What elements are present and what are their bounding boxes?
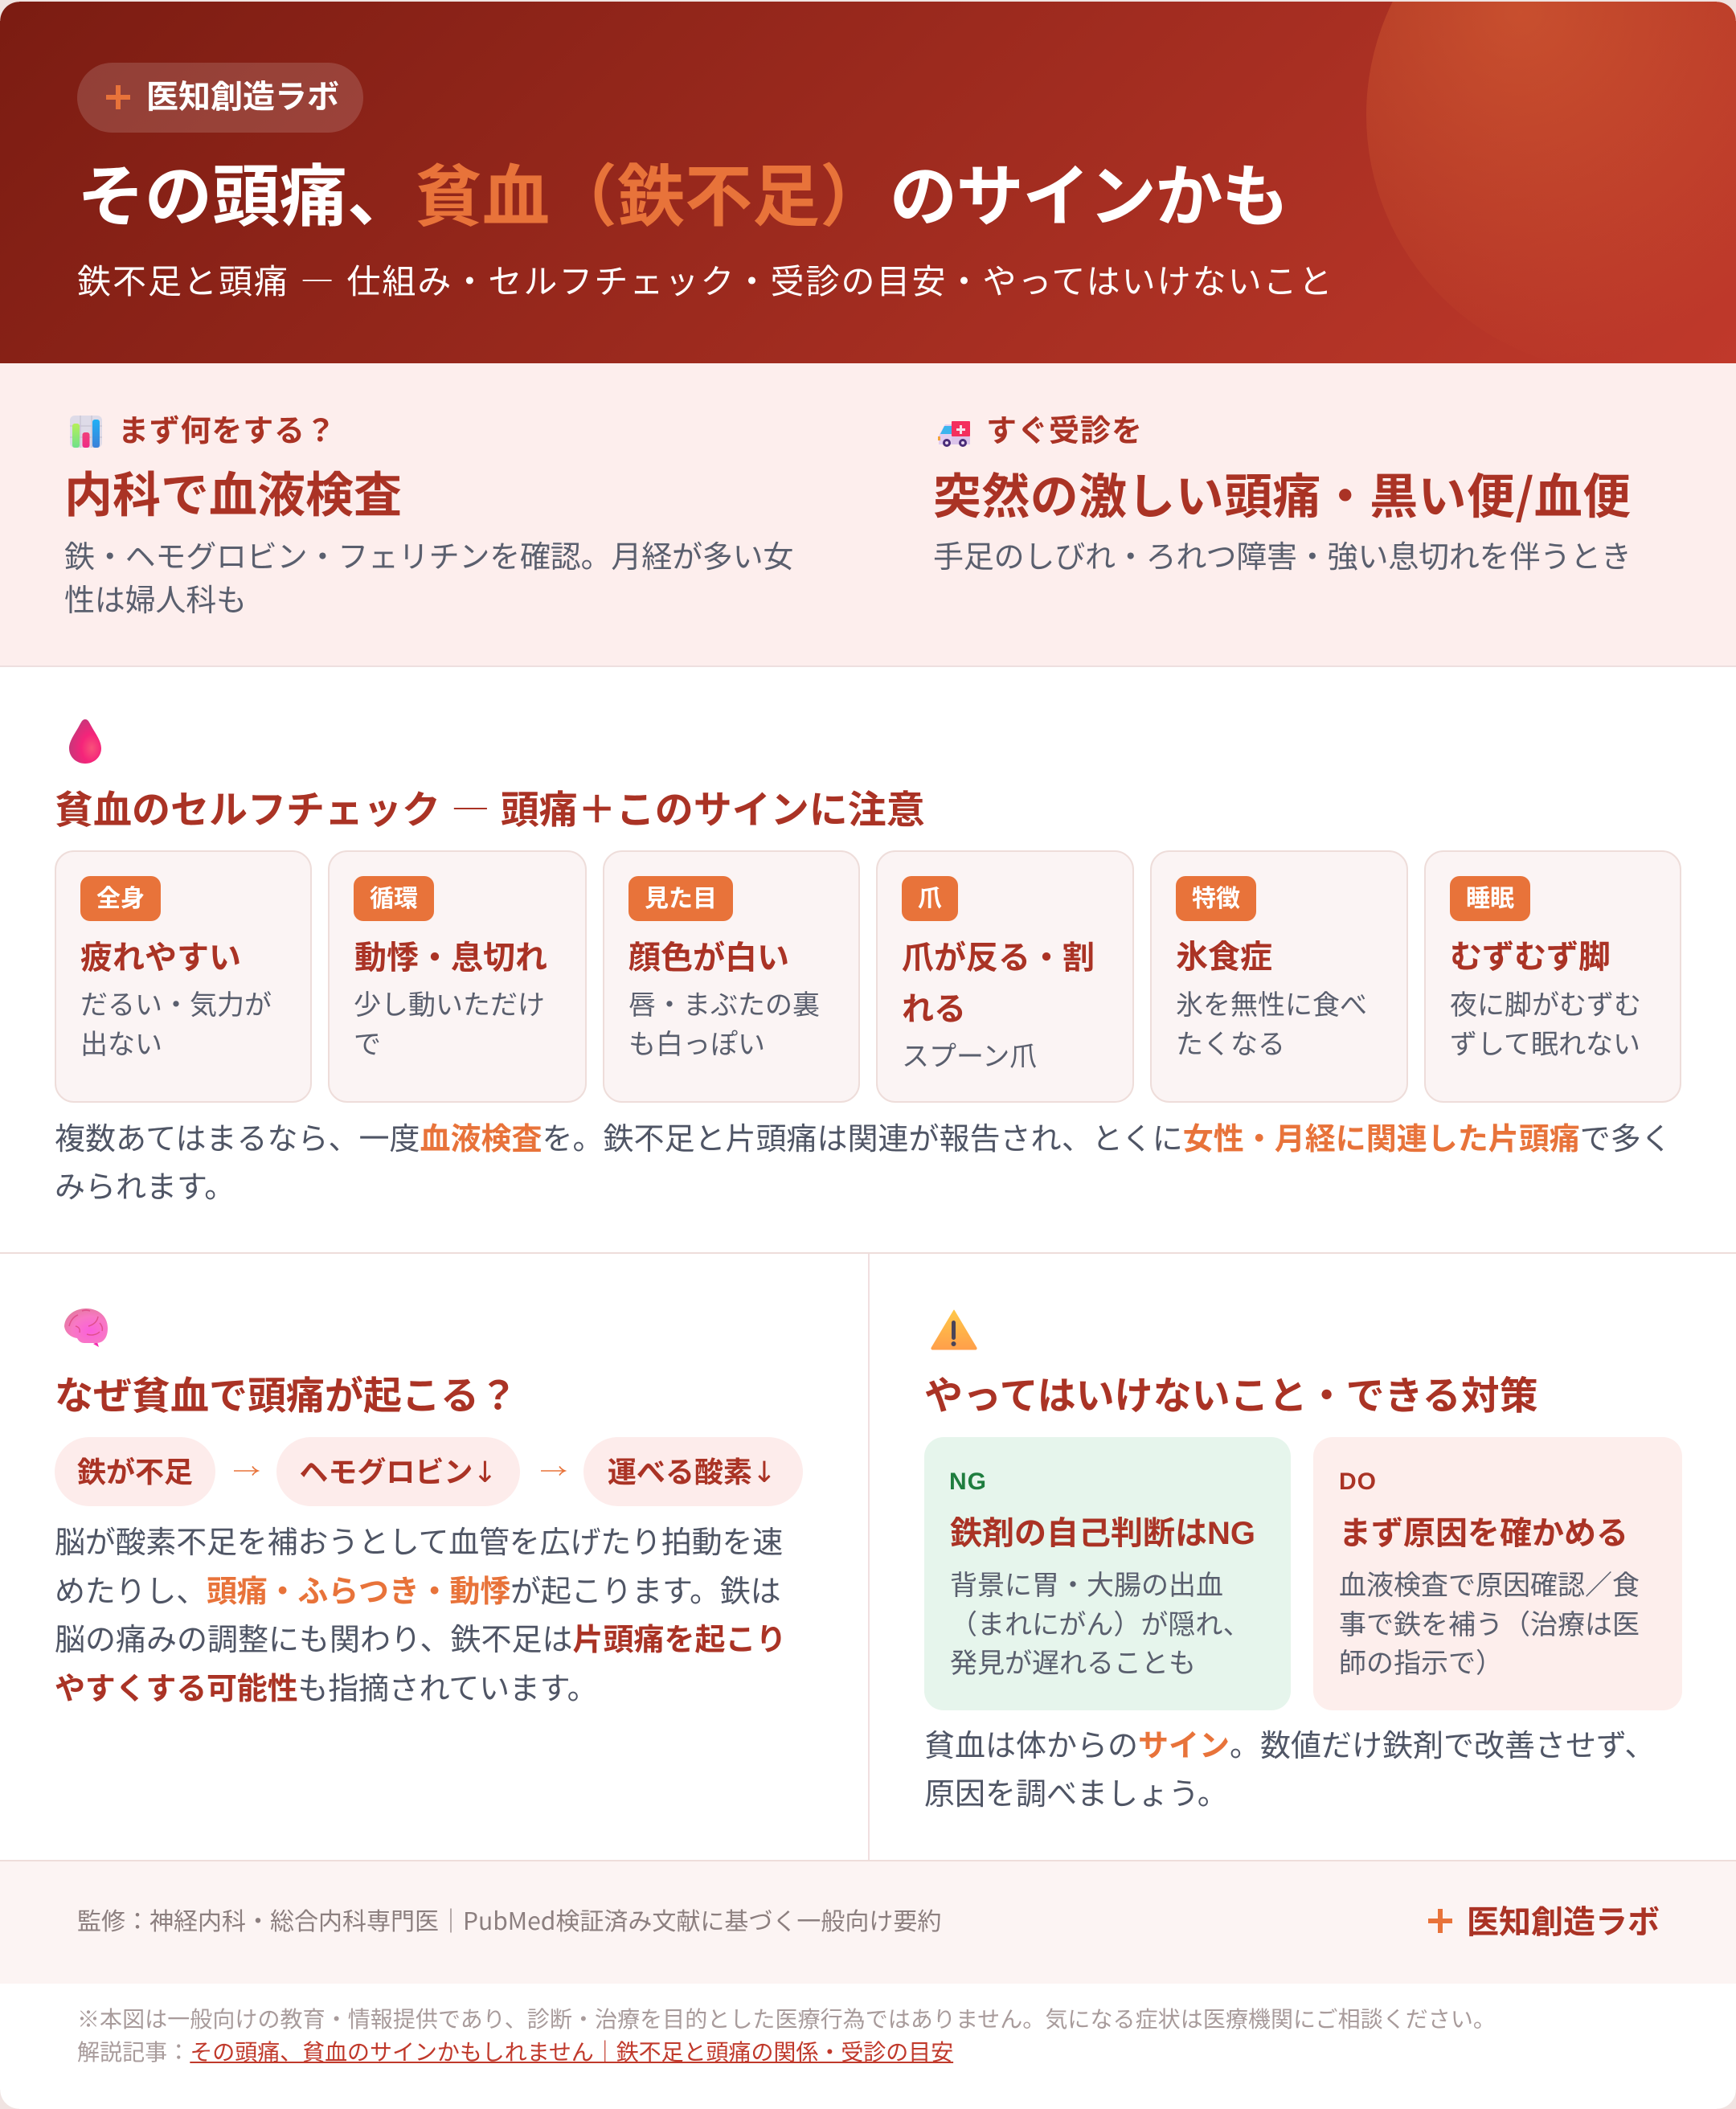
DO text: [1339, 1566, 1640, 1683]
mechanism text: やすくする可能性も指摘されています。: [55, 1673, 597, 1706]
footer brand: 医知創造ラボ: [1467, 1905, 1660, 1940]
subtitle: 鉄不足と頭痛 — 仕組み・セルフチェック・受診の目安・やってはいけないこと: [77, 255, 1334, 304]
step: [55, 1437, 215, 1506]
tag: 爪: [918, 886, 942, 912]
DO text: 師の指示で）: [1339, 1648, 1503, 1679]
divider: [0, 1252, 1736, 1254]
icon: warning: [931, 1308, 977, 1350]
label: すぐ受診を: [986, 415, 1143, 448]
card: fatigue: [55, 850, 312, 1103]
panel: dos and don'ts: [870, 1254, 1736, 1860]
text: 手足のしびれ・ろれつ障害・強い息切れを伴うとき: [933, 541, 1632, 575]
caution note: 貧血は体からのサイン。数値だけ鉄剤で改善させず、: [924, 1730, 1655, 1763]
NG box: [924, 1437, 1291, 1710]
icon: ambulance: [938, 421, 970, 447]
tag: 特徴: [1192, 886, 1240, 912]
mechanism text: 脳の痛みの調整にも関わり、鉄不足は片頭痛を起こり: [55, 1624, 786, 1657]
card text: 少し動いただけ: [354, 990, 545, 1021]
card title: 疲れやすい: [80, 940, 241, 976]
card title: [902, 940, 1095, 1027]
disclaimer: 解説記事：その頭痛、貧血のサインかもしれません｜鉄不足と頭痛の関係・受診の目安: [77, 2040, 953, 2065]
tag: [354, 876, 434, 921]
heading: やってはいけないこと・できる対策: [924, 1375, 1538, 1418]
card title: 爪が反る・割: [902, 940, 1095, 976]
caution note: 原因を調べましょう。: [924, 1778, 1228, 1812]
divider: [868, 1254, 870, 1861]
card: pagophagia: [1150, 850, 1408, 1103]
tag: 睡眠: [1466, 886, 1514, 912]
NG label: NG: [949, 1468, 987, 1495]
card text: [354, 990, 545, 1059]
symptom cards: [55, 850, 1681, 1103]
self-check note: みられます。: [55, 1171, 235, 1205]
icon: blood drop: [69, 719, 101, 764]
self-check note: [55, 1123, 1672, 1205]
decorative circle: [1366, 0, 1736, 372]
heading: 突然の激しい頭痛・黒い便/血便: [933, 458, 1631, 528]
card title: 氷食症: [1176, 940, 1272, 975]
card title: 動悸・息切れ: [354, 940, 547, 976]
supervision note: 監修：神経内科・総合内科専門医｜PubMed検証済み文献に基づく一般向け要約: [77, 1902, 941, 1937]
NG title: 鉄剤の自己判断はNG: [950, 1516, 1255, 1551]
card title: むずむず脚: [1450, 940, 1611, 975]
header banner: [0, 2, 1736, 363]
left column: what to do first: [64, 415, 793, 618]
footer brand: [1428, 1898, 1661, 1947]
tag: [1450, 876, 1530, 921]
tag: 循環: [370, 886, 418, 912]
card text: [80, 990, 272, 1059]
disclaimer: ※本図は一般向けの教育・情報提供であり、診断・治療を目的とした医療行為ではありません。気になる症状は医療機関にご相談ください。: [77, 2007, 1496, 2032]
card text: たくなる: [1176, 1029, 1285, 1059]
tag: [902, 876, 958, 921]
NG text: [950, 1566, 1251, 1683]
icon: bar chart: [70, 416, 102, 448]
right column: see a doctor immediately: [933, 415, 1632, 575]
causal chain: [55, 1437, 803, 1506]
NG text: 背景に胃・大腸の出血: [950, 1570, 1223, 1601]
label: まず何をする？: [118, 415, 337, 448]
heading: 内科で血液検査: [64, 469, 402, 522]
panel: self check: [55, 719, 925, 834]
mechanism text: [55, 1519, 786, 1714]
NG text: 発見が遅れることも: [950, 1648, 1196, 1679]
step: 鉄が不足: [77, 1456, 193, 1489]
card text: 氷を無性に食べ: [1176, 990, 1367, 1021]
text: 鉄・ヘモグロビン・フェリチンを確認。月経が多い女: [64, 541, 793, 575]
footer band: [0, 1860, 1736, 1984]
caution note: [924, 1722, 1655, 1819]
DO title: まず原因を確かめる: [1339, 1516, 1628, 1551]
DO label: DO: [1339, 1468, 1377, 1495]
tag: [628, 876, 733, 921]
card text: で: [354, 1029, 381, 1059]
card title: 顔色が白い: [628, 940, 789, 976]
tag: 全身: [96, 886, 145, 912]
card text: 夜に脚がむずむ: [1450, 990, 1641, 1021]
tag: 見た目: [645, 886, 717, 912]
DO box: [1313, 1437, 1682, 1710]
panel: action summary: [0, 363, 1736, 667]
arrow: [541, 1466, 567, 1476]
tag: [80, 876, 161, 921]
title: その頭痛、貧血（鉄不足）のサインかも: [77, 159, 1288, 235]
card text: 出ない: [80, 1029, 162, 1059]
card: pale face: [603, 850, 860, 1103]
card text: ずして眠れない: [1450, 1029, 1640, 1059]
card text: [1176, 990, 1367, 1059]
text: [64, 541, 793, 618]
heading: なぜ貧血で頭痛が起こる？: [55, 1375, 518, 1418]
card title: れる: [902, 992, 966, 1027]
card: nails: [876, 850, 1134, 1103]
card: restless legs: [1424, 850, 1681, 1103]
card text: [628, 990, 820, 1059]
step: [583, 1437, 803, 1506]
self-check note: 複数あてはまるなら、一度血液検査を。鉄不足と片頭痛は関連が報告され、とくに女性・月経に関連した片頭痛で多く: [55, 1123, 1672, 1157]
DO text: 事で鉄を補う（治療は医: [1339, 1609, 1640, 1640]
panel: mechanism: [55, 1308, 518, 1418]
card text: も白っぽい: [628, 1029, 765, 1059]
NG text: （まれにがん）が隠れ、: [950, 1609, 1251, 1640]
arrow: [234, 1466, 260, 1476]
brand pill: 医知創造ラボ: [146, 80, 339, 115]
step: [276, 1437, 520, 1506]
card text: [1450, 990, 1641, 1059]
tag: [1176, 876, 1256, 921]
DO text: 血液検査で原因確認／食: [1339, 1570, 1640, 1601]
card text: だるい・気力が: [80, 990, 272, 1021]
brand pill: [77, 63, 363, 133]
step: 運べる酸素↓: [608, 1456, 776, 1489]
card text: 唇・まぶたの裏: [628, 990, 820, 1021]
icon: brain: [64, 1308, 108, 1347]
text: 性は婦人科も: [64, 584, 247, 618]
card: palpitations: [328, 850, 587, 1103]
mechanism text: めたりし、頭痛・ふらつき・動悸が起こります。鉄は: [55, 1575, 780, 1609]
card text: スプーン爪: [902, 1042, 1037, 1072]
mechanism text: 脳が酸素不足を補おうとして血管を広げたり拍動を速: [55, 1526, 783, 1560]
step: ヘモグロビン↓: [299, 1456, 497, 1489]
heading: 貧血のセルフチェック — 頭痛＋このサインに注意: [55, 778, 925, 834]
disclaimer: [77, 2003, 1496, 2069]
